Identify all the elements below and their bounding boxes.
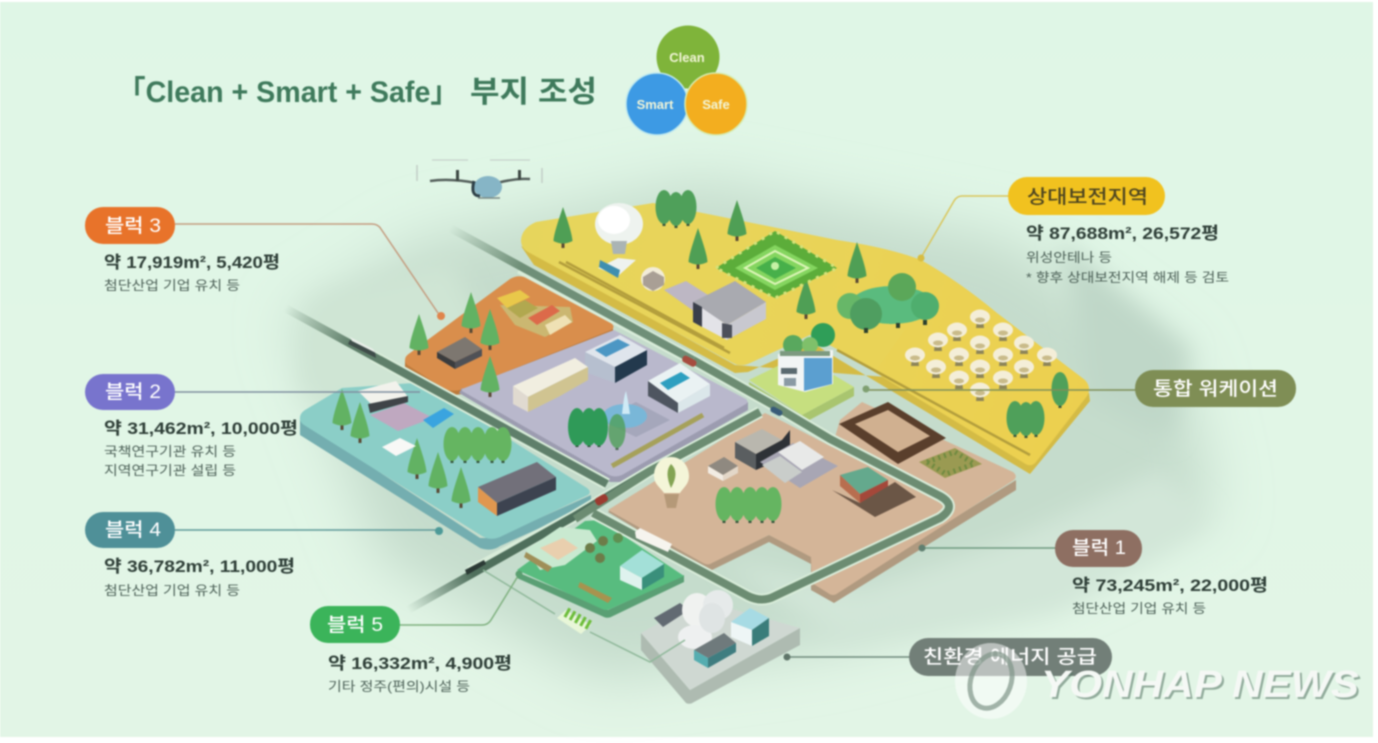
callout: block 3 [85,207,445,320]
lavender block buildings and fountain [513,335,710,450]
icon: clean smart safe circles: Safe [702,97,730,112]
roads [285,228,949,610]
callout: block 1: 블럭 1 [1072,537,1126,559]
panel: block 5 (green) [517,520,684,618]
building: data center in conservation zone [641,267,766,340]
block 5 buildings [524,527,664,603]
callout: block 2: 지역연구기관 설립 등 [104,463,236,478]
background: blurred mountain terrain [290,180,1215,680]
callout: block 1: 약 73,245m², 22,000평 [1072,576,1268,595]
icon: satellite antenna [595,203,643,278]
vehicles: train, cars, bus [348,337,784,575]
title: 부지 조성 [470,76,597,109]
icon: garden [716,231,837,298]
callout: conservation zone: 약 87,688m², 26,572평 [1026,224,1219,243]
icon: eco light bulb [654,457,689,508]
callout: eco energy supply: 친환경 에너지 공급 [923,646,1097,668]
panel: conservation zone (yellow) [521,203,1090,474]
panel: block A (lavender) [459,330,748,482]
callout: conservation zone: 위성안테나 등 [1026,250,1112,265]
callout: block 5: 블럭 5 [327,614,383,636]
block 1 buildings [708,402,982,523]
callout: block 5 [310,570,522,694]
title: 「Clean + Smart + Safe」 [117,76,459,109]
callout: block 1: 첨단산업 기업 유치 등 [1072,601,1206,616]
callout: block 3: 첨단산업 기업 유치 등 [104,278,240,293]
callout: conservation zone [918,177,1229,285]
callout: block 3: 약 17,919m², 5,420평 [104,253,280,272]
callout: block 5: 기타 정주(편의)시설 등 [328,679,470,694]
icon: battery with power line [483,570,685,662]
watermark: Yonhap News: YONHAP NEWS [1043,666,1361,708]
icon: clean smart safe circles [626,26,747,135]
panel: block 1 (tan) [608,402,1016,603]
callout: block 4 [85,512,443,598]
icon: drone air taxi [417,160,542,198]
conservation zone trees [554,190,1068,438]
callout: integrated workation: 통합 워케이션 [1153,378,1278,400]
callout: conservation zone: * 향후 상대보전지역 해제 등 검토 [1026,270,1229,285]
callout: block 4: 약 36,782m², 11,000평 [104,557,295,576]
icon: clean smart safe circles: Smart [637,97,674,112]
callout: block 1 [918,530,1268,616]
callout: block 2: 약 31,462m², 10,000평 [104,419,298,438]
callout: block 5: 약 16,332m², 4,900평 [328,654,512,673]
block 3 buildings [437,290,573,369]
watermark: Yonhap News: YONHAP NEWS [1041,664,1359,706]
callout: block 2: 블럭 2 [105,381,161,403]
block 3 and block 2/4 trees [332,292,500,508]
watermark: Yonhap News [955,643,1361,719]
energy facility [654,590,769,668]
forest bushes [837,273,939,333]
callout: block 2 [85,374,420,478]
callout: integrated workation [862,370,1296,407]
panel: block 3 (orange) [405,276,614,396]
fence lines on conservation zone [559,262,1030,466]
panel: energy utility block (grey) [641,600,800,704]
callout: block 2: 국책연구기관 유치 등 [104,444,236,459]
panel: workation block (light green) [749,355,854,424]
small satellite dish array [905,310,1057,401]
callout: block 4: 블럭 4 [105,519,161,541]
callout: eco energy supply [784,638,1112,676]
callout: block 3: 블럭 3 [105,215,161,237]
building group: workation [778,323,835,392]
teal block buildings [358,381,556,516]
callout: conservation zone: 상대보전지역 [1027,186,1148,208]
callout: block 4: 첨단산업 기업 유치 등 [104,583,240,598]
icon: clean smart safe circles: Clean [669,50,705,65]
panel: block 2/4 (teal) [300,383,591,550]
